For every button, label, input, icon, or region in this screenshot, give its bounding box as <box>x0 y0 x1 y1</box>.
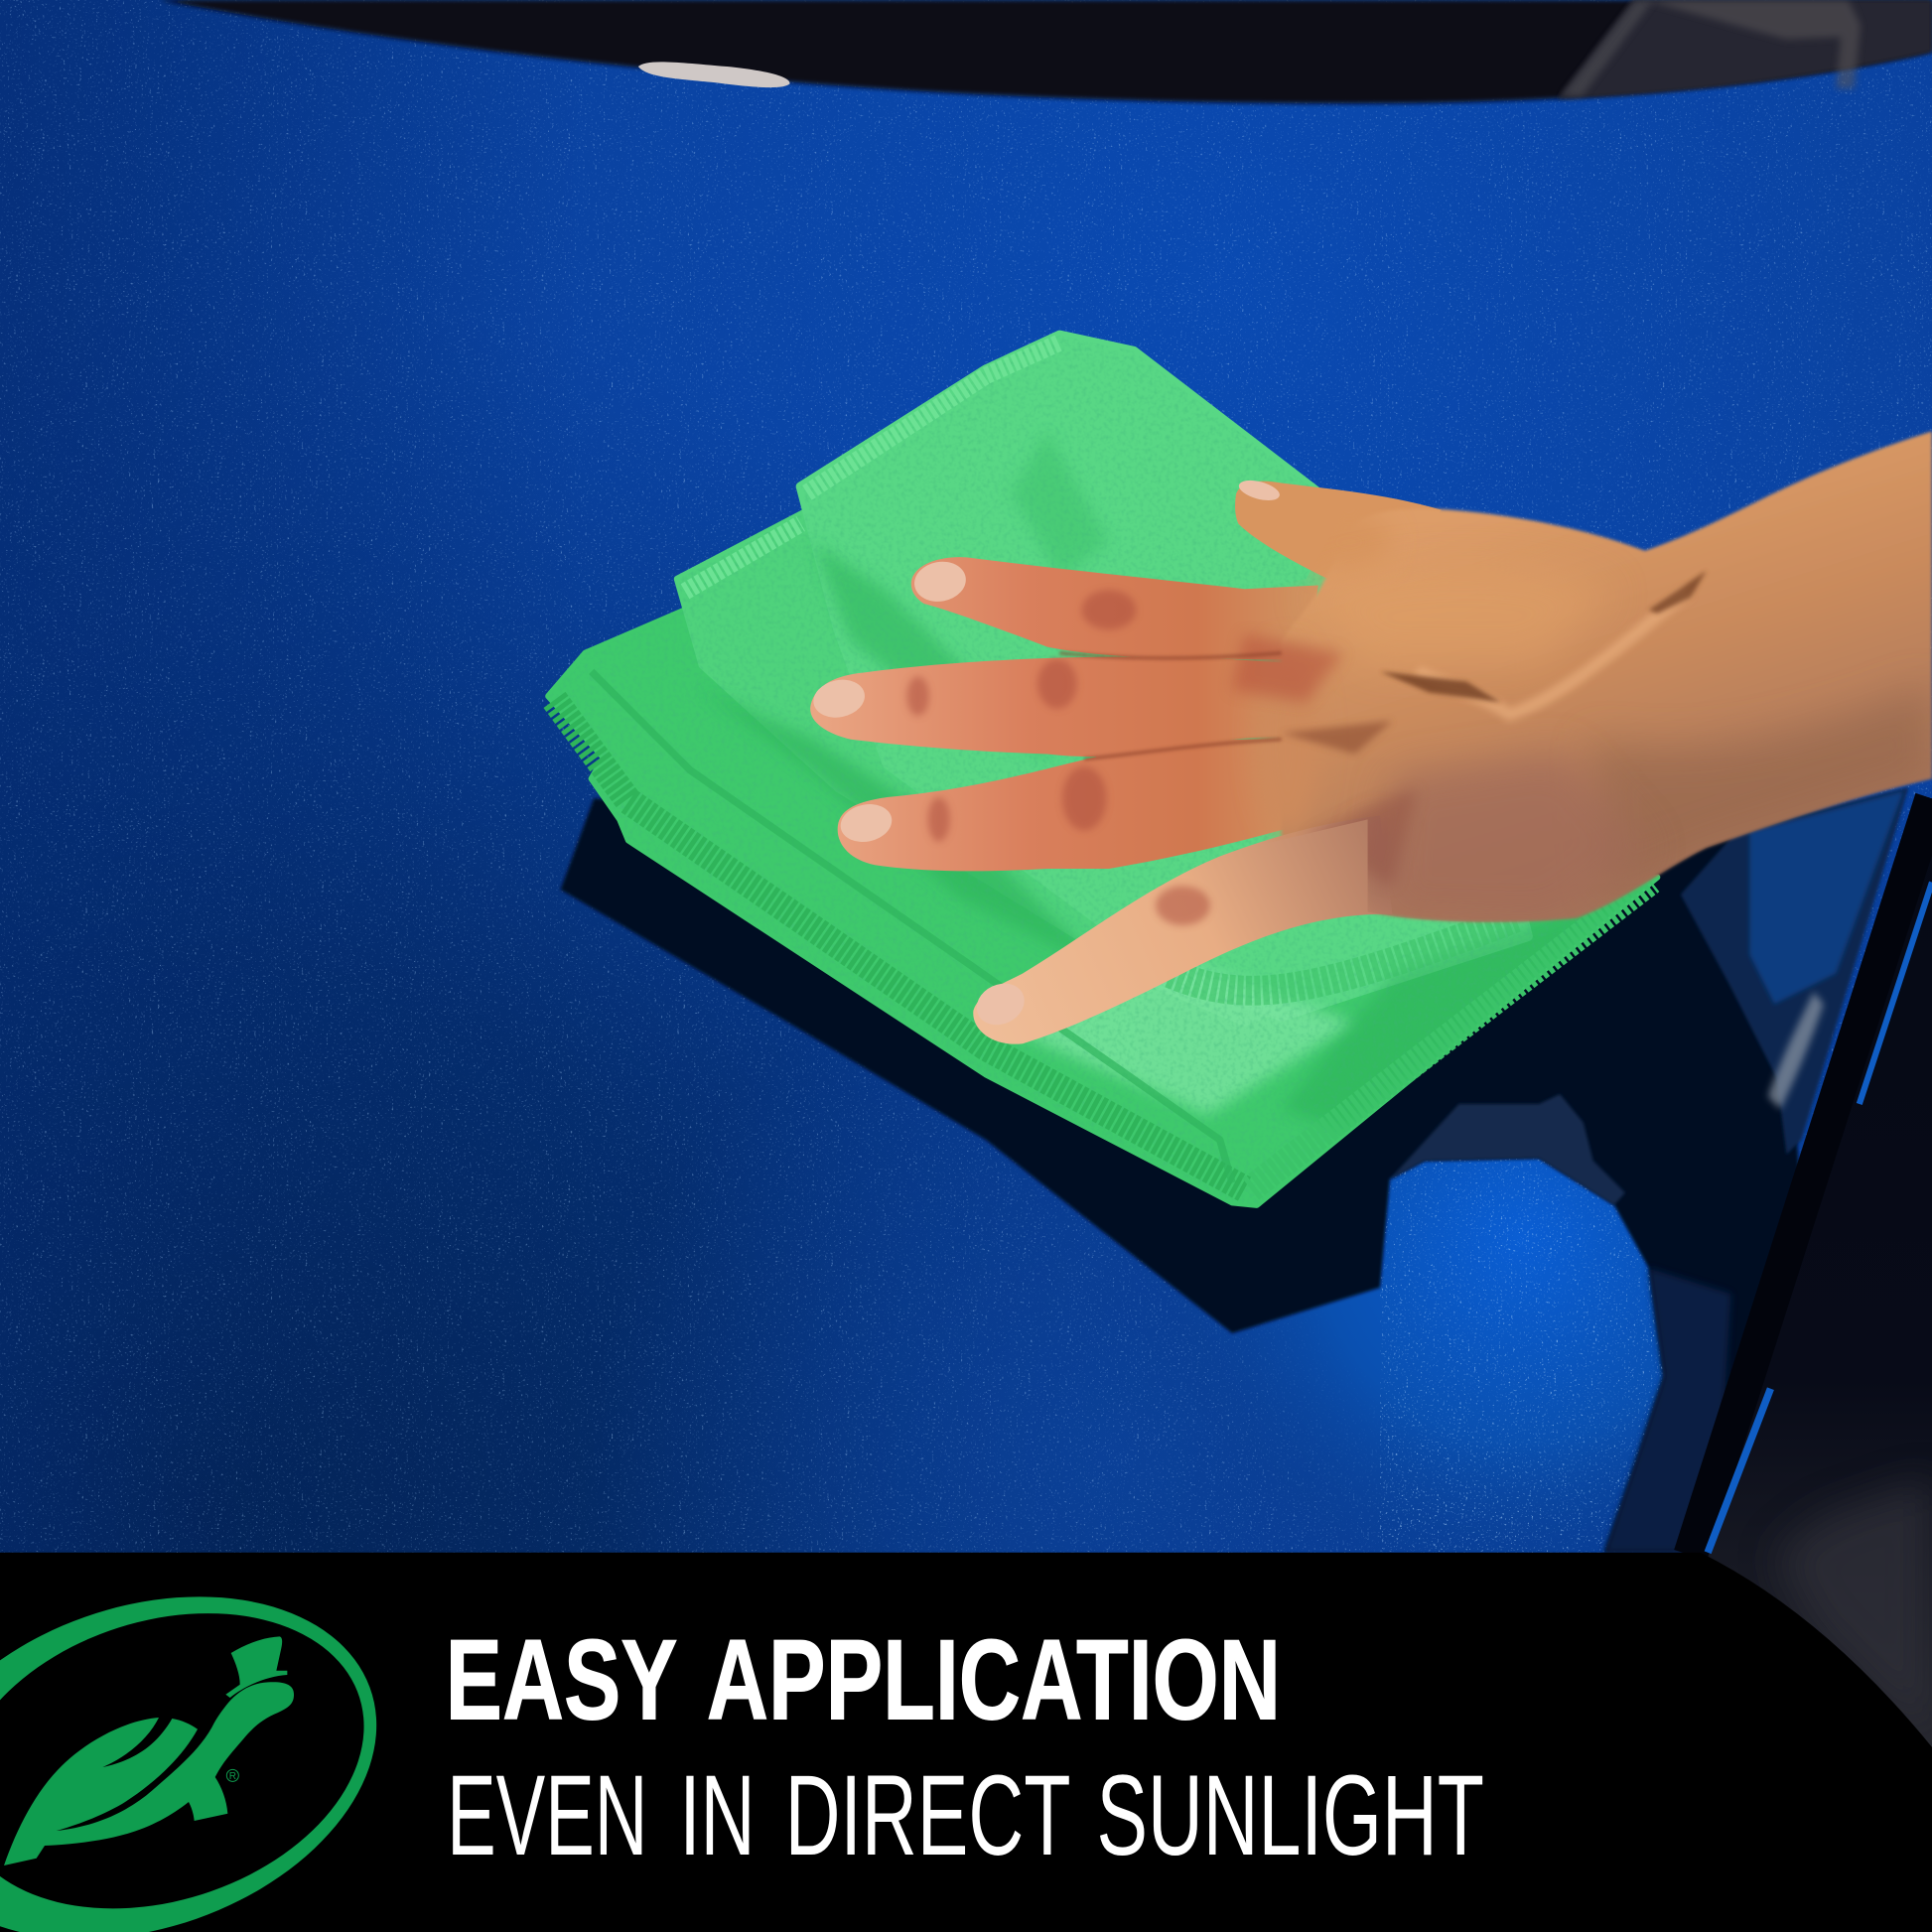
heading: easy application <box>446 1616 1281 1743</box>
thumb <box>1235 482 1442 592</box>
logo oval ring <box>0 1596 376 1932</box>
subheading: even in direct sunlight <box>447 1752 1484 1879</box>
towel: top fold <box>801 336 1528 1017</box>
subheading: even in direct sunlight: EVEN <box>447 1752 647 1879</box>
middle finger <box>810 657 1318 757</box>
hand and forearm <box>810 431 1932 1044</box>
photo: lit fender panel <box>1681 787 1908 1155</box>
finger creases <box>1059 653 1282 759</box>
subheading: even in direct sunlight: IN <box>679 1752 756 1879</box>
knuckle marks <box>906 590 1210 925</box>
heading: easy application: EASY <box>446 1616 678 1743</box>
towel: middle fold <box>678 511 1478 1023</box>
photo: fender reflections <box>1380 1094 1731 1553</box>
microfiber towel <box>542 333 1663 1207</box>
ring finger <box>838 740 1318 871</box>
subheading: even in direct sunlight: SUNLIGHT <box>1097 1752 1484 1879</box>
logo top hat <box>225 1636 287 1698</box>
photo: reflected blue bowl on fender <box>1084 1011 1824 1553</box>
logo registered mark <box>226 1769 238 1782</box>
heading: easy application: APPLICATION <box>707 1616 1281 1743</box>
knuckle creases, veins and shadows <box>1232 564 1932 924</box>
door highlight lines <box>1860 883 1932 1104</box>
towel: shaded creases <box>542 333 1663 1207</box>
black caption band <box>0 1553 1932 1932</box>
logo registered mark: R <box>229 1771 236 1782</box>
seam blending over finger bases <box>1256 510 1405 911</box>
photo: door and door gap <box>1691 798 1932 1762</box>
towel: ribbed hems <box>554 343 1651 1189</box>
index finger <box>911 557 1318 659</box>
photo: shadow under towel <box>561 798 1799 1553</box>
pinky finger <box>973 816 1392 1044</box>
logo turtle body <box>4 1682 294 1865</box>
photo: dark windshield at top <box>160 0 1932 103</box>
back of hand and forearm <box>1282 431 1932 922</box>
subheading: even in direct sunlight: DIRECT <box>785 1752 1070 1879</box>
towel: bottom fold <box>548 610 1657 1205</box>
logo: turtle in oval <box>0 1596 376 1932</box>
fingernails <box>810 477 1282 1033</box>
windshield highlight <box>638 62 790 87</box>
